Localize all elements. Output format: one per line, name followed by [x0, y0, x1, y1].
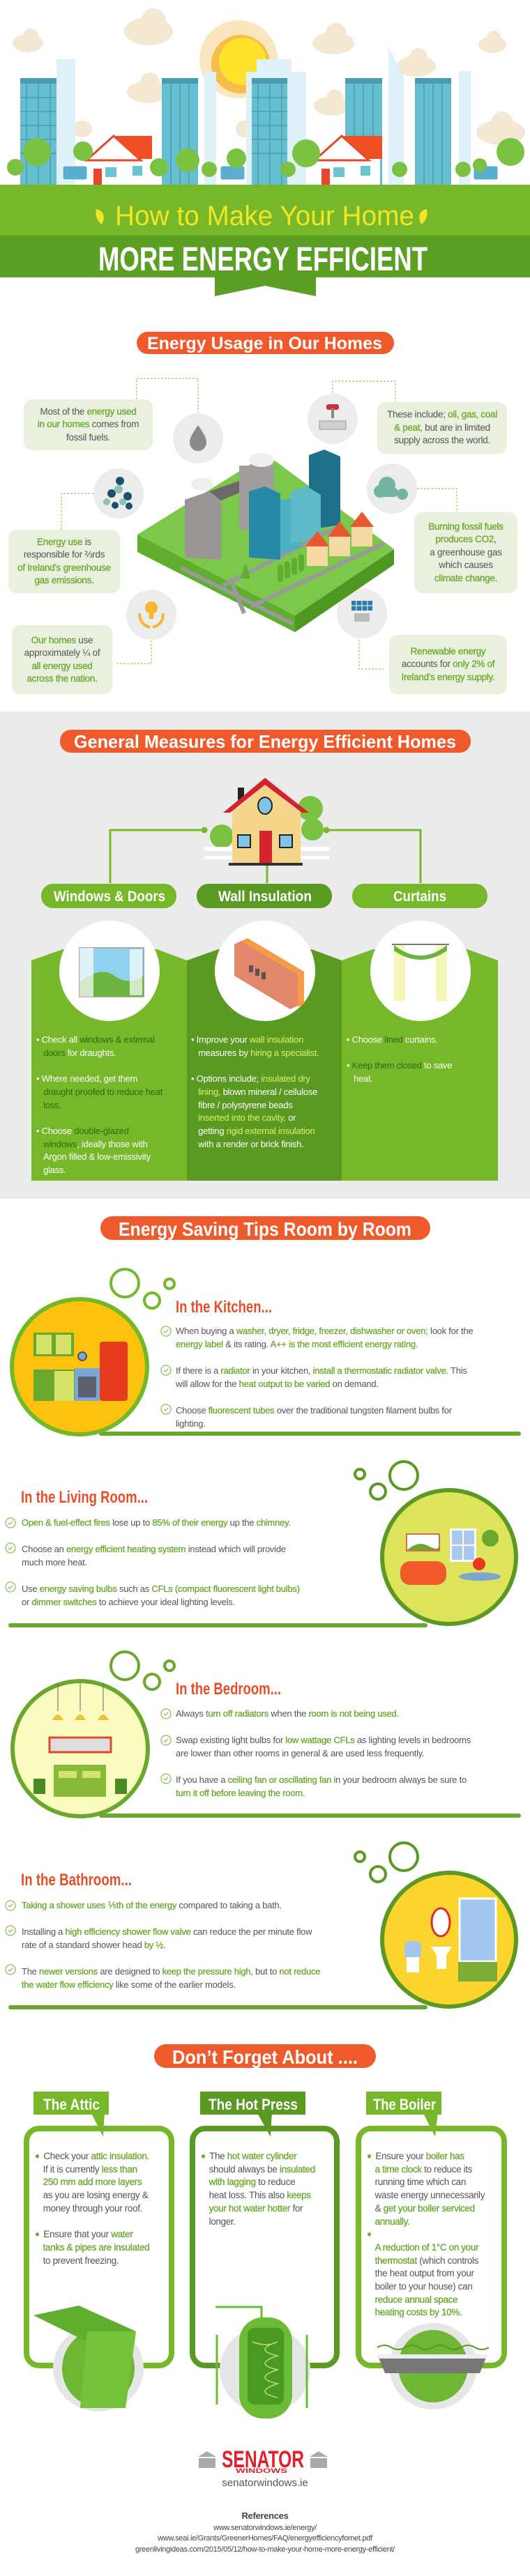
text box: homes quarter: across the nation.: [26, 673, 98, 684]
references: www.senatorwindows.ie/energy/: [213, 2523, 317, 2531]
bedroom tips: are lower than other rooms in general & are used less frequently.: [176, 1748, 424, 1758]
text box: co2: which causes: [439, 560, 493, 570]
text box: fuel types: [377, 402, 507, 454]
bathroom tips: Taking a shower uses ⅕th of the energy compared to taking a bath.: [22, 1900, 282, 1910]
icon: coal molecules: [93, 468, 144, 519]
text box: co2: [414, 512, 517, 593]
text box: renewable: Renewable energy: [411, 646, 485, 657]
dashed connectors: [61, 378, 457, 669]
references: References: [241, 2510, 289, 2521]
bathroom tips: the water flow efficiency like some of the earlier models.: [22, 1979, 236, 1990]
text box: homes quarter: Our homes use: [31, 634, 93, 645]
text box: homes quarter: all energy used: [31, 661, 93, 670]
icon: oil drop: [173, 413, 223, 463]
column text: windows and doors: doors for draughts.: [43, 1048, 116, 1058]
icon: window circle: [59, 921, 160, 1021]
living room tips: Choose an energy efficient heating system instead which will provide: [22, 1544, 286, 1554]
column text: wall insulation: inserted into the cavity, or: [198, 1112, 296, 1123]
column text: wall insulation: lining, blown mineral / cellulose: [198, 1087, 317, 1097]
boiler tips: thermostat (which controls: [375, 2255, 478, 2266]
icon: co2 cloud: [367, 463, 417, 514]
clouds: [13, 8, 525, 145]
column pills: [41, 884, 487, 908]
text box: emissions: responsible for ⅔rds: [24, 549, 105, 560]
card: boiler: [358, 2092, 504, 2409]
icon: lightbulb in hands: [126, 590, 176, 640]
sun: [199, 20, 278, 98]
text box: fuel types: These include; oil, gas, coal: [387, 409, 497, 420]
text box: emissions: [8, 530, 120, 593]
kitchen tips: lighting.: [176, 1418, 206, 1429]
bedroom tips: turn it off before leaving the room.: [176, 1788, 305, 1798]
website url: senatorwindows.ie: [222, 2477, 308, 2489]
text box: co2: Burning fossil fuels: [428, 521, 503, 532]
boiler tips: a time clock to reduce its: [375, 2164, 472, 2175]
connector lines: [110, 828, 421, 883]
text box: fossil fuels: fossil fuels.: [66, 432, 110, 443]
attic tips: as you are losing energy &: [43, 2190, 148, 2200]
attic tips: If it is currently less than: [43, 2164, 137, 2175]
hot press tips: heat loss. This also keeps: [209, 2190, 311, 2200]
icon: solar panel: [337, 588, 387, 638]
green columns: [31, 949, 498, 1181]
living room tips: [22, 1517, 300, 1607]
card: attic: The Attic: [43, 2096, 100, 2113]
room titles: In the Bedroom...: [176, 1680, 281, 1699]
section 2 graphics: general measures: [0, 712, 530, 1199]
column text: windows and doors: windows, ideally those with: [43, 1139, 147, 1149]
room titles: In the Kitchen...: [176, 1298, 272, 1317]
column text: windows and doors: • Choose double-glazed: [36, 1126, 129, 1136]
text box: renewable: [389, 635, 507, 694]
bathroom illustration: [10, 1843, 516, 2007]
check icons: [6, 1326, 171, 1975]
bathroom tips: The newer versions are designed to keep the pressure high, but to not reduce: [22, 1966, 320, 1977]
column text: windows and doors: loss.: [43, 1100, 61, 1110]
bathroom tips: rate of a standard shower head by ½.: [22, 1940, 165, 1950]
column text: windows and doors: glass.: [43, 1165, 66, 1175]
hot press tips: [199, 2151, 315, 2227]
column pills: Windows & Doors: [54, 889, 165, 905]
boiler tips: boiler to your house) can: [375, 2281, 472, 2292]
hero banner: [0, 8, 530, 296]
boiler tips: ➧ Ensure your boiler has: [365, 2151, 464, 2161]
column text: wall insulation: • Options include; insulated dry: [191, 1073, 310, 1084]
trees: [7, 138, 524, 177]
column text: windows and doors: [36, 1034, 163, 1175]
attic tips: tanks & pipes are insulated: [43, 2242, 149, 2253]
kitchen tips: If there is a radiator in your kitchen, install a thermostatic radiator valve. This: [176, 1365, 467, 1376]
text box: fuel types: supply across the world.: [394, 435, 490, 445]
bedroom illustration: [13, 1652, 519, 1816]
text box: co2: climate change.: [434, 573, 497, 583]
living room tips: Use energy saving bulbs such as CFLs (compact fluorescent light bulbs): [22, 1584, 300, 1594]
references: www.seai.ie/Grants/GreenerHomes/FAQ/energyefficiencyfornet.pdf: [158, 2534, 372, 2543]
hot press tips: ➧ The hot water cylinder: [199, 2151, 296, 2161]
ground band: [0, 185, 530, 236]
room titles: [21, 1298, 281, 1889]
attic tips: [33, 2151, 149, 2266]
hot press tips: longer.: [209, 2216, 236, 2227]
attic tips: to prevent freezing.: [43, 2255, 119, 2266]
attic tips: ➧ Ensure that your water: [33, 2229, 132, 2239]
attic tips: ➧ Check your attic insulation.: [33, 2151, 149, 2161]
isometric city: [137, 450, 394, 632]
ribbon with main title: MORE ENERGY EFFICIENT: [98, 241, 427, 278]
column text: wall insulation: [191, 1034, 319, 1149]
text box: emissions: Energy use is: [37, 537, 91, 546]
bedroom tips: Always turn off radiators when the room is not being used.: [176, 1708, 399, 1719]
boiler tips: & get your boiler serviced: [375, 2203, 475, 2214]
section 4 graphics: don't forget: [24, 2044, 507, 2418]
hot press tips: should always be insulated: [209, 2164, 315, 2175]
icon: gas valve: [308, 394, 358, 444]
icon: house: [204, 778, 330, 866]
column text: windows and doors: • Where needed, get them: [36, 1073, 137, 1084]
kitchen tips: When buying a washer, dryer, fridge, freezer, dishwasher or oven; look for the: [176, 1326, 473, 1336]
bedroom tips: If you have a ceiling fan or oscillating fan in your bedroom always be sure to: [176, 1774, 467, 1785]
text box: emissions: of Ireland's greenhouse: [17, 562, 111, 573]
heading pill: don't forget: Don’t Forget About ....: [172, 2046, 358, 2068]
section 3 graphics: rooms: [5, 1216, 521, 2009]
column pills: Wall Insulation: [218, 889, 312, 905]
column text: wall insulation: fibre / polystyrene beads: [198, 1100, 292, 1110]
kitchen tips: Choose fluorescent tubes over the traditional tungsten filament bulbs for: [176, 1405, 452, 1416]
boiler tips: [365, 2151, 485, 2318]
heading pill: energy usage: Energy Usage in Our Homes: [147, 334, 382, 353]
room titles: In the Bathroom...: [21, 1871, 132, 1889]
text box: co2: a greenhouse gas: [430, 547, 502, 558]
ribbon with main title: [0, 236, 530, 296]
kitchen tips: [176, 1326, 473, 1429]
hot press tips: with lagging to reduce: [209, 2177, 295, 2187]
references: greenlivingideas.com/2015/05/12/how-to-make-your-home-more-energy-efficient/: [135, 2545, 395, 2554]
attic tips: money through your roof.: [43, 2203, 142, 2214]
text box: homes quarter: [12, 625, 112, 694]
hot press tips: your hot water hotter for: [209, 2203, 303, 2214]
text box: renewable: accounts for only 2% of: [402, 659, 494, 669]
boiler tips: annually.: [375, 2216, 410, 2227]
text box: fossil fuels: Most of the energy used: [40, 406, 136, 417]
boiler tips: reduce annual space: [375, 2294, 457, 2305]
houses: [86, 136, 382, 185]
card: hot press: The Hot Press: [209, 2096, 298, 2113]
column pills: Curtains: [393, 889, 446, 905]
text box: renewable: Ireland's energy supply.: [402, 672, 494, 682]
column text: curtains: heat.: [354, 1073, 373, 1084]
column text: wall insulation: with a render or brick finish.: [198, 1139, 304, 1149]
living room tips: Open & fuel-effect fires lose up to 85% of their energy up the chimney.: [22, 1517, 291, 1528]
bedroom tips: Swap existing light bulbs for low wattage CFLs as lighting levels in bedrooms: [176, 1735, 471, 1745]
section 1 graphics: [61, 332, 457, 670]
icon: insulated wall circle: [215, 921, 315, 1021]
references: [135, 2510, 395, 2554]
heading pill: room by room: Energy Saving Tips Room by Room: [119, 1218, 411, 1240]
card: boiler: The Boiler: [373, 2096, 436, 2113]
column text: wall insulation: measures by hiring a specialist.: [198, 1048, 319, 1058]
room titles: In the Living Room...: [21, 1488, 148, 1507]
boiler tips: waste energy unnecessarily: [375, 2190, 485, 2200]
text box: fuel types: & peat, but are in limited: [394, 422, 490, 433]
living room illustration: [10, 1462, 516, 1625]
card: attic: [26, 2092, 172, 2412]
column text: curtains: • Choose lined curtains.: [347, 1034, 438, 1045]
boiler tips: the heat output from your: [375, 2268, 474, 2278]
heading pill: general measures: General Measures for Energy Efficient Homes: [74, 731, 456, 752]
column text: windows and doors: • Check all windows & external: [36, 1034, 155, 1045]
bathroom tips: Installing a high efficiency shower flow valve can reduce the per minute flow: [22, 1926, 312, 1937]
boiler tips: A reduction of 1°C on your: [375, 2242, 478, 2253]
kitchen tips: energy label & its rating. A++ is the most efficient energy rating.: [176, 1339, 418, 1349]
bedroom tips: [176, 1708, 471, 1798]
living room tips: or dimmer switches to achieve your ideal lighting levels.: [22, 1597, 235, 1607]
light buildings: [56, 47, 471, 185]
kitchen tips: will allow for the heat output to be varied on demand.: [176, 1379, 379, 1389]
text box: co2: produces CO2,: [436, 534, 496, 544]
teal towers: [20, 78, 451, 185]
column text: wall insulation: getting rigid external insulation: [198, 1126, 315, 1136]
logo: senator windows: SENATOR: [222, 2446, 304, 2473]
logo: senator windows: WINDOWS: [236, 2467, 287, 2474]
column text: windows and doors: Argon filled & low-emissivity: [43, 1151, 151, 1162]
solar panels: [63, 166, 498, 180]
bathroom tips: [22, 1900, 321, 1990]
column text: wall insulation: • Improve your wall insulation: [191, 1034, 303, 1045]
boiler tips: ➧: [365, 2229, 373, 2239]
text box: emissions: gas emissions.: [34, 575, 94, 585]
title line 1: How to Make Your Home: [115, 201, 414, 231]
text box: homes quarter: approximately ¼ of: [24, 647, 100, 658]
icon: curtains circle: [370, 921, 471, 1021]
attic tips: 250 mm add more layers: [43, 2177, 142, 2187]
boiler tips: running time which can: [375, 2177, 466, 2187]
living room tips: much more heat.: [22, 1557, 87, 1567]
kitchen illustration: [12, 1269, 519, 1434]
boiler tips: heating costs by 10%.: [375, 2307, 462, 2317]
column text: windows and doors: draught proofed to reduce heat: [43, 1087, 162, 1097]
text box: fossil fuels: in our homes comes from: [38, 419, 139, 429]
text box: fossil fuels: [24, 399, 153, 450]
column text: curtains: [347, 1034, 452, 1084]
column text: curtains: • Keep them closed to save: [347, 1060, 452, 1071]
card: hot press: [192, 2092, 337, 2418]
